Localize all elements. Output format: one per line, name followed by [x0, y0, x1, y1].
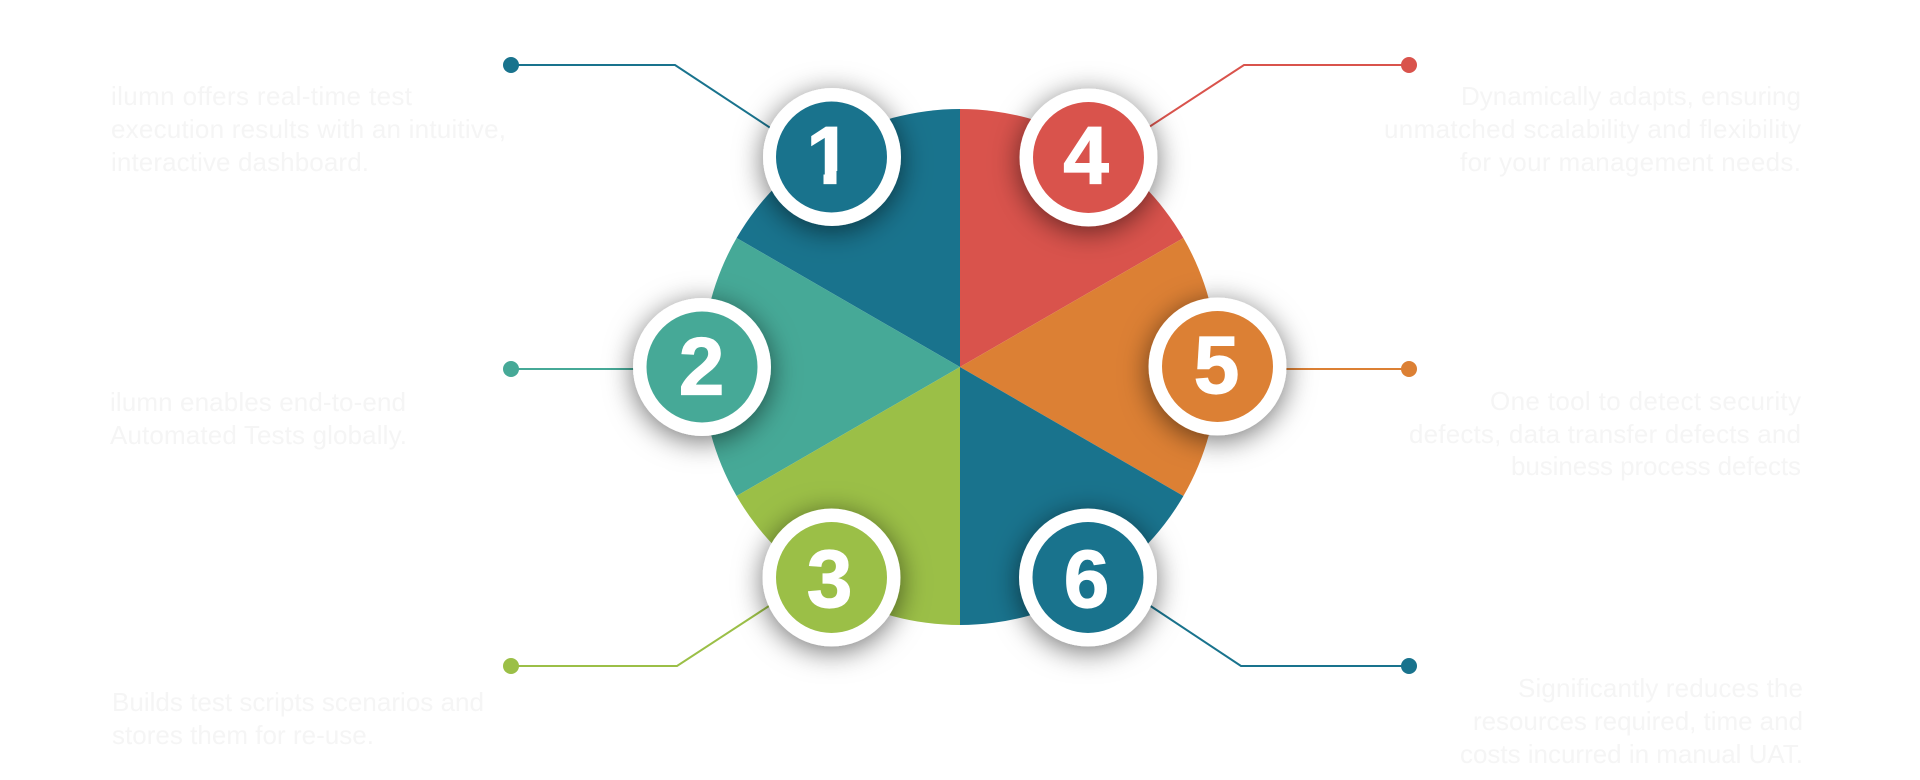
connector 4 [1146, 57, 1417, 129]
text 6 [1460, 673, 1803, 769]
text 3: Builds test scripts scenarios and [112, 687, 484, 717]
text 2 [110, 387, 407, 450]
text 1: ilumn offers real-time test [111, 81, 413, 111]
text 4: for your management needs. [1460, 147, 1801, 177]
text 6: resources required, time and [1473, 706, 1803, 736]
connector 6 [1149, 605, 1417, 674]
text 3: stores them for re-use. [112, 720, 374, 750]
text 2: Automated Tests globally. [110, 420, 407, 450]
text 2: ilumn enables end-to-end [110, 387, 406, 417]
badge 4 [1020, 88, 1158, 226]
badge 4: 4 [1063, 110, 1109, 202]
connector 1 [503, 57, 772, 129]
badge 6: 6 [1064, 534, 1109, 625]
segment 6 [960, 367, 1183, 625]
badge 2: 2 [679, 322, 724, 412]
connector 3 [503, 604, 772, 674]
pie chart [702, 109, 1218, 625]
segment 5 [960, 238, 1218, 496]
text 1 [111, 81, 506, 177]
text 3 [112, 687, 484, 750]
segment 3 [737, 367, 960, 625]
segment 4 [960, 109, 1183, 367]
text 5: business process defects [1511, 451, 1801, 481]
badge 5 [1148, 298, 1286, 436]
text 1: execution results with an intuitive, [111, 114, 506, 144]
badge 5: 5 [1194, 320, 1239, 411]
badge 3: 3 [807, 534, 852, 625]
text 5: One tool to detect security [1490, 386, 1801, 416]
badge 2 [633, 298, 771, 436]
connector 5 [1280, 361, 1417, 377]
text 6: Significantly reduces the [1518, 673, 1803, 703]
text 5 [1409, 386, 1801, 481]
text 4 [1384, 81, 1801, 177]
badge 1 [763, 88, 901, 226]
badge 1: 1 [806, 110, 852, 202]
text 1: interactive dashboard. [111, 147, 369, 177]
segment 2 [702, 238, 960, 496]
text 4: Dynamically adapts, ensuring [1461, 81, 1801, 111]
connector 2 [503, 361, 640, 377]
text 6: costs incurred in manual UAT. [1460, 739, 1803, 769]
text 4: unmatched scalability and flexibility [1384, 114, 1801, 144]
badge 3 [762, 508, 900, 646]
badge 6 [1019, 508, 1157, 646]
segment 1 [737, 109, 960, 367]
text 5: defects, data transfer defects and [1409, 419, 1801, 449]
